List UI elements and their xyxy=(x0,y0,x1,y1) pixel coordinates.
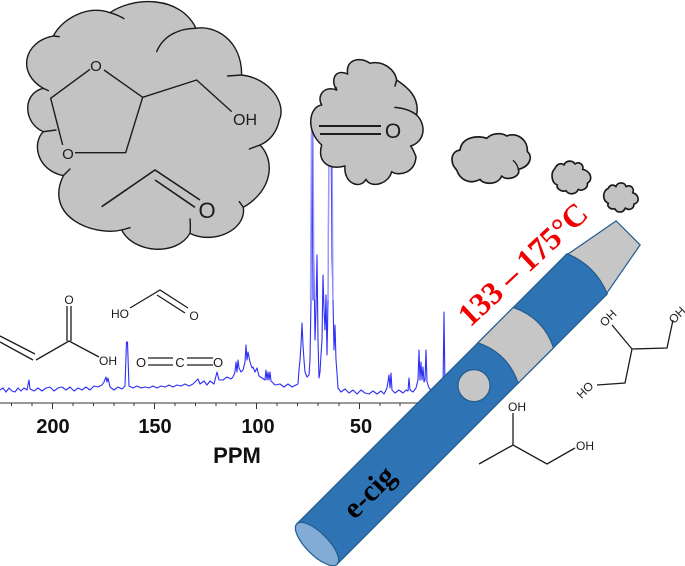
open end xyxy=(289,516,345,566)
molecule: formic acid: HO xyxy=(111,307,129,321)
molecule: dioxolane methanol: O xyxy=(62,146,74,163)
axis tick labels: 50 xyxy=(350,416,372,438)
small vapour cloud 3 xyxy=(604,183,638,212)
molecule: carbon dioxide: O xyxy=(213,355,223,370)
molecule: propylene glycol xyxy=(479,400,594,464)
molecule: acrylic acid xyxy=(0,293,117,368)
grey band xyxy=(478,303,558,383)
blue body xyxy=(297,249,612,564)
device label: e-cig xyxy=(336,459,402,525)
molecule: propylene glycol: OH xyxy=(508,400,526,414)
temperature label: 133 – 175°C xyxy=(450,195,595,333)
NMR spectrum trace xyxy=(0,130,448,394)
molecule: glycerol: HO xyxy=(574,379,596,401)
molecule: formaldehyde: O xyxy=(385,120,401,143)
molecule: acetaldehyde: O xyxy=(198,198,216,223)
molecule: glycerol xyxy=(574,304,685,401)
molecule: formic acid: O xyxy=(189,309,199,323)
molecule: acrylic acid: OH xyxy=(99,354,117,368)
axis title: PPM xyxy=(213,443,261,468)
axis tick labels: 200 xyxy=(36,416,70,438)
large vapour cloud xyxy=(27,2,281,249)
mouthpiece tip xyxy=(566,213,648,295)
molecule: formaldehyde xyxy=(319,120,401,143)
button xyxy=(451,363,497,408)
molecule: dioxolane methanol: OH xyxy=(233,112,257,129)
axis tick labels: 100 xyxy=(241,416,275,438)
molecule: carbon dioxide: C xyxy=(175,355,185,370)
small vapour cloud 2 xyxy=(552,161,591,194)
molecule: dioxolane methanol xyxy=(51,58,257,163)
molecule: propylene glycol: OH xyxy=(576,439,594,453)
axis tick labels: 150 xyxy=(138,416,172,438)
formaldehyde cloud xyxy=(311,60,423,184)
molecule: carbon dioxide xyxy=(136,355,223,370)
molecule: glycerol: OH xyxy=(597,307,619,329)
e-cig device xyxy=(289,213,648,566)
molecule: formic acid xyxy=(111,290,199,323)
molecule: carbon dioxide: O xyxy=(136,355,146,370)
small vapour cloud 1 xyxy=(452,134,530,183)
molecule: dioxolane methanol: O xyxy=(90,58,102,75)
axis tick labels xyxy=(36,416,372,438)
molecule: acrylic acid: O xyxy=(64,293,74,307)
molecule: acetaldehyde xyxy=(102,170,216,223)
x axis with ticks xyxy=(0,403,420,409)
